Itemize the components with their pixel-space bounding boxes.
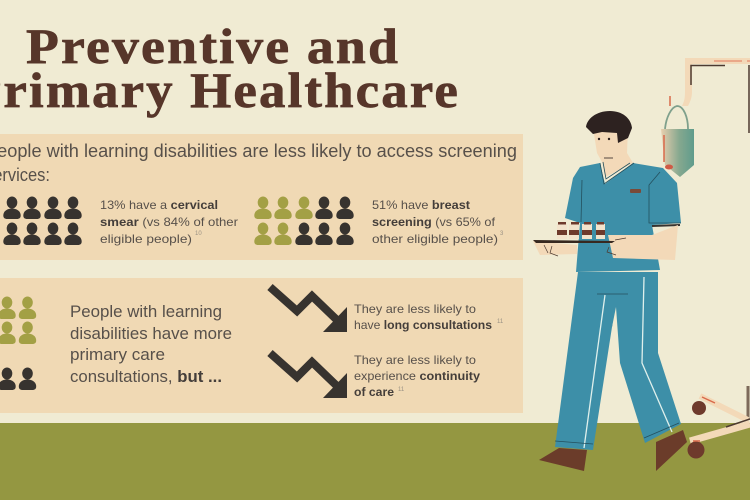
shoes [539, 430, 687, 471]
consultations text: disabilities have more [70, 325, 232, 343]
illustration: IV bag [661, 106, 694, 177]
hair [586, 111, 632, 143]
tray [533, 240, 615, 243]
long consultations text: have long consultations [354, 318, 492, 332]
icon group: cervical smear people [3, 196, 82, 245]
breast screening text [372, 198, 504, 246]
consultations text: People with learning [70, 303, 222, 321]
continuity text: They are less likely to [354, 353, 476, 367]
long consultations text [354, 302, 504, 332]
cervical smear text: 13% have a cervical [100, 198, 218, 212]
neck and face [593, 128, 633, 177]
breast screening text: other eligible people) [372, 232, 498, 246]
ground [0, 423, 750, 500]
icon group: consultation people [0, 296, 36, 390]
continuity text: of care [354, 385, 394, 399]
arms [533, 225, 678, 260]
cervical smear text: eligible people) [100, 232, 192, 246]
long consultations text: They are less likely to [354, 302, 476, 316]
continuity text: experience continuity [354, 369, 480, 383]
cervical smear text [100, 198, 238, 246]
facial features [598, 138, 613, 158]
consultations text [70, 303, 232, 386]
cervical smear text: 10 [195, 231, 202, 237]
illustration: healthcare worker [533, 111, 687, 471]
screening intro text [0, 141, 517, 185]
breast screening text: 51% have breast [372, 198, 470, 212]
cervical smear text: smear (vs 84% of other [100, 215, 238, 229]
hand details [544, 238, 626, 256]
illustration: IV stand [670, 58, 750, 458]
scrub top [565, 162, 681, 272]
screening intro text: People with learning disabilities are less likely to access screening [0, 141, 517, 161]
panel: screening [0, 134, 523, 260]
trousers [555, 272, 681, 450]
title: Preventive and [26, 18, 400, 74]
consultations text: primary care [70, 346, 165, 364]
consultations text: consultations, but ... [70, 368, 222, 386]
long consultations text: 11 [497, 319, 504, 325]
breast screening text: 3 [500, 231, 504, 237]
arrow: continuity down [270, 353, 347, 398]
panel: consultations [0, 278, 523, 413]
breast screening text: screening (vs 65% of [372, 215, 496, 229]
icon group: breast screening people [254, 196, 354, 245]
bottles on tray [557, 222, 605, 239]
continuity text [354, 353, 480, 399]
arrow: long consultations down [270, 287, 347, 332]
continuity text: 11 [398, 387, 405, 393]
title [0, 18, 460, 118]
